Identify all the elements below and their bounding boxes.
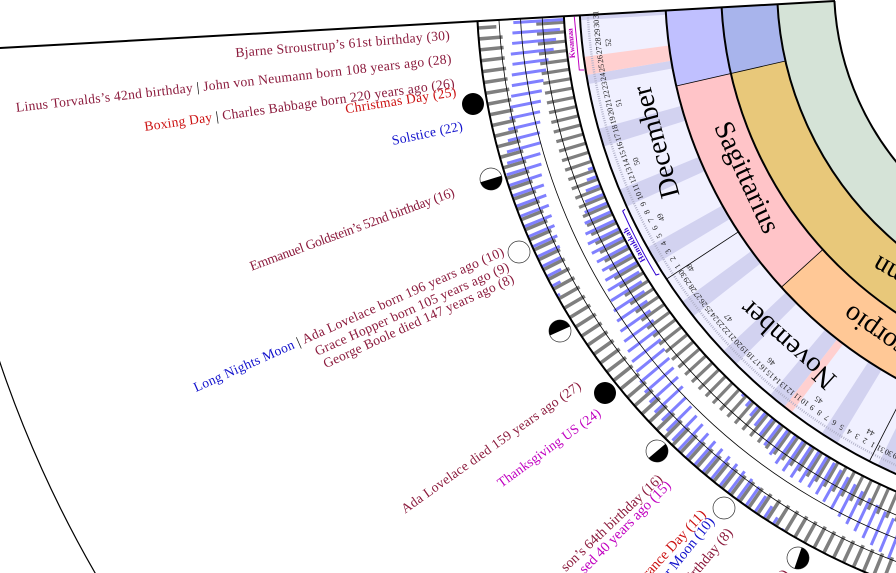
week numbers: 47 [723, 312, 735, 324]
day numbers: 25 [703, 304, 715, 316]
day numbers: 19 [607, 115, 618, 125]
ring: season autumn [732, 62, 896, 312]
outer boundary arc [0, 360, 96, 573]
day numbers: 17 [612, 132, 623, 143]
day numbers: 1 [673, 262, 682, 271]
day numbers: 27 [692, 290, 704, 302]
ring: season winter [722, 5, 784, 73]
day numbers: 14 [621, 157, 632, 168]
day numbers: 15 [764, 368, 776, 380]
day numbers: 8 [815, 408, 824, 418]
day numbers: 4 [845, 427, 853, 437]
label: Lovelace death: Ada Lovelace died 159 years ago (27) [398, 378, 584, 517]
label: birthday 16: son’s 64th birthday (16) [558, 472, 666, 573]
grey night ticks inner [536, 21, 896, 522]
centre blank [821, 0, 896, 278]
day numbers: 6 [650, 224, 660, 232]
day numbers: 26 [697, 297, 709, 309]
label: Torvalds and von Neumann: Linus Torvalds’s 42nd birthday | John von Neumann born 108 years ago (28) [15, 51, 452, 116]
day numbers: 20 [732, 337, 744, 349]
Kwanzaa label: Kwanzaa [565, 28, 577, 59]
label: Hopper: Grace Hopper born 105 years ago (9) [312, 259, 512, 359]
weekend stripes [599, 0, 896, 500]
day numbers: 16 [758, 362, 770, 374]
day numbers: 11 [792, 391, 804, 403]
day numbers: 10 [799, 396, 811, 408]
thin hour rings [498, 18, 896, 562]
day numbers: 27 [594, 46, 604, 55]
label: Long Nights Moon and Lovelace: Long Nights Moon | Ada Lovelace born 196 years ago (10) [191, 244, 507, 396]
day numbers: 24 [598, 72, 608, 82]
moon: half [545, 316, 575, 346]
day numbers: 10 [634, 190, 645, 201]
day numbers: 5 [838, 422, 846, 432]
day numbers: 24 [708, 311, 720, 323]
day numbers: 23 [714, 318, 726, 329]
month: December: December [626, 82, 686, 201]
day numbers: 30 [592, 19, 601, 28]
day numbers: 14 [771, 374, 783, 386]
grey night ticks outer [460, 0, 896, 573]
moon: full [713, 497, 735, 519]
day numbers: 29 [592, 28, 602, 37]
day numbers: 7 [823, 413, 831, 422]
day numbers: 20 [605, 107, 616, 117]
label: Boxing Day and Babbage: Boxing Day | Charles Babbage born 220 years ago (26) [143, 75, 456, 135]
day numbers: 12 [785, 385, 797, 397]
day numbers: 23 [600, 81, 610, 90]
blue moon bars [500, 4, 896, 573]
day numbers: 18 [745, 350, 757, 362]
moon: half [642, 436, 672, 466]
day numbers: 28 [687, 283, 699, 294]
day numbers: 31 [875, 443, 886, 455]
day numbers: 1 [869, 440, 877, 450]
label: Christmas Day: Christmas Day (25) [344, 84, 457, 117]
week numbers: 49 [655, 212, 667, 223]
day numbers: 13 [624, 166, 635, 177]
week numbers: 48 [684, 262, 696, 274]
day numbers: 29 [681, 275, 693, 287]
moon: half [477, 165, 505, 193]
day numbers: 12 [627, 174, 638, 185]
day numbers: 28 [593, 37, 603, 46]
day numbers: 22 [601, 89, 612, 99]
label: Solstice: Solstice (22) [390, 118, 464, 149]
label: Boole: George Boole died 147 years ago (8) [321, 271, 517, 372]
thick ring outlines [447, 0, 896, 573]
day numbers: 25 [597, 63, 607, 73]
Hanukkah label: Hanukkah [621, 226, 647, 264]
day numbers: 30 [883, 447, 894, 459]
ring: zodiac Sagittarius [677, 74, 822, 286]
label: Goldstein: Emmanuel Goldstein’s 52nd birthday (16) [248, 185, 457, 274]
day numbers: 9 [808, 403, 816, 412]
week numbers: 52 [603, 38, 613, 47]
day numbers: 2 [861, 436, 869, 446]
moon: new [594, 382, 616, 404]
day numbers: 21 [726, 331, 738, 343]
day numbers: 3 [853, 431, 861, 441]
day numbers: 15 [618, 149, 629, 160]
week numbers: 50 [631, 156, 642, 167]
label: Stroustrup: Bjarne Stroustrup’s 61st birthday (30) [235, 28, 450, 61]
week numbers: 51 [613, 98, 624, 108]
sector boundaries [657, 56, 896, 470]
ring: innermost green [778, 2, 896, 241]
holiday stripes [584, 46, 843, 412]
Kwanzaa bracket [574, 17, 584, 70]
day numbers: 17 [751, 356, 763, 368]
shorter first outer tick [496, 24, 502, 29]
week numbers: 46 [765, 356, 777, 368]
day numbers: 3 [663, 247, 673, 255]
week numbers: 44 [865, 426, 876, 438]
ring: zodiac Scorpio [782, 250, 896, 377]
week numbers [603, 27, 877, 450]
moon: full [508, 241, 530, 263]
day numbers: 7 [646, 216, 656, 224]
day numbers: 2 [668, 255, 678, 263]
ring: zodiac Capricorn [666, 8, 730, 86]
day numbers: 9 [638, 200, 648, 208]
Hanukkah bracket [623, 209, 659, 275]
moon: half [784, 544, 812, 572]
label: Thanksgiving: Thanksgiving US (24) [494, 405, 604, 491]
dotted hour ring [586, 16, 896, 466]
moon: new [462, 93, 484, 115]
day numbers: 31 [591, 11, 601, 19]
week numbers: 45 [813, 394, 825, 406]
day numbers: 8 [642, 208, 652, 216]
day numbers: 26 [595, 55, 605, 64]
day numbers: 11 [630, 182, 642, 193]
day numbers: 21 [603, 98, 614, 108]
top radial edge [0, 1, 835, 49]
day numbers: 4 [659, 240, 669, 248]
day numbers: 30 [677, 268, 688, 280]
day numbers: 19 [738, 344, 750, 356]
ring: calendar days background [599, 0, 896, 500]
month: November: November [734, 293, 843, 395]
day numbers [591, 0, 896, 491]
day numbers: 18 [610, 124, 621, 134]
day numbers: 22 [720, 324, 732, 336]
day numbers: 6 [830, 418, 838, 427]
day numbers: 13 [778, 380, 790, 392]
zodiac: Sagittarius: Sagittarius [707, 117, 786, 238]
day numbers: 5 [654, 232, 664, 240]
day numbers: 16 [615, 141, 626, 151]
